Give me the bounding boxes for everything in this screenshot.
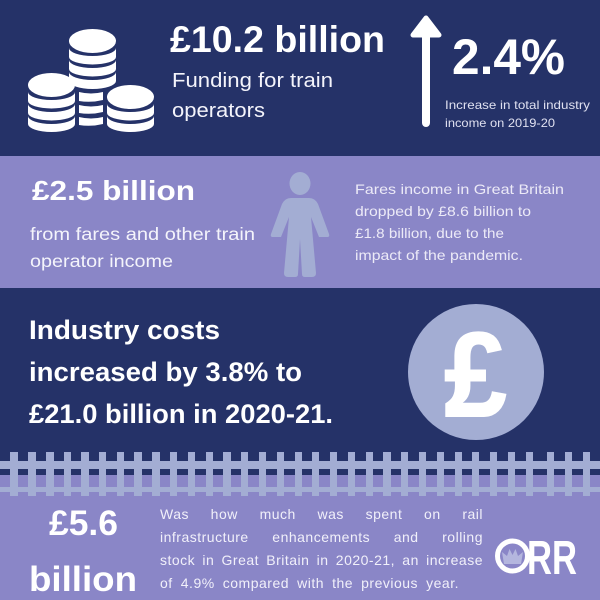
icon: pound coin: £ (444, 308, 506, 442)
heading: industry costs: £21.0 billion in 2020-21. (29, 399, 333, 429)
text: funding description: Funding for train (172, 70, 333, 92)
stat: spending amount: billion (29, 560, 137, 599)
text: funding description (172, 70, 333, 122)
text: spending explanation (160, 506, 483, 591)
text: fares explanation: £1.8 billion, due to the (355, 225, 504, 241)
arrow: increase (413, 18, 439, 126)
railway track (0, 452, 600, 496)
title: funding amount: £10.2 billion (170, 19, 385, 60)
panel: fares background (0, 156, 600, 288)
text: fares explanation: Fares income in Great Britain (355, 181, 564, 197)
icon: pound coin (408, 304, 544, 442)
text: fares explanation: impact of the pandemic. (355, 247, 523, 263)
logo: ORR (498, 532, 577, 585)
text: spending explanation: stock in Great Britain in 2020-21, an increase (160, 552, 483, 568)
panel: costs background (0, 288, 600, 475)
stat: spending amount (29, 504, 137, 599)
text: increase description: Increase in total industry (445, 98, 590, 112)
text: spending explanation: Was how much was spent on rail (160, 506, 483, 522)
icon: person (271, 172, 329, 277)
heading: industry costs (29, 315, 333, 429)
text: fares description (30, 224, 255, 271)
heading: industry costs: Industry costs (29, 315, 220, 345)
text: increase description (445, 98, 590, 130)
panel: spending background (0, 475, 600, 600)
icon: stacks of coins (28, 29, 154, 132)
text: fares explanation: dropped by £8.6 billion to (355, 203, 531, 219)
text: spending explanation: infrastructure enhancements and rolling (160, 529, 483, 545)
logo: ORR: RR (527, 532, 577, 585)
text: fares description: from fares and other train (30, 224, 255, 244)
panel: funding background (0, 0, 600, 156)
heading: industry costs: increased by 3.8% to (29, 357, 302, 387)
title: fares amount: £2.5 billion (32, 175, 195, 206)
text: fares explanation (355, 181, 564, 263)
text: increase description: income on 2019-20 (445, 116, 555, 130)
stat: spending amount: £5.6 (49, 504, 118, 543)
text: fares description: operator income (30, 251, 173, 271)
text: spending explanation: of 4.9% compared with the previous year. (160, 575, 459, 591)
stat: income increase: 2.4% (452, 29, 565, 85)
text: funding description: operators (172, 100, 265, 122)
